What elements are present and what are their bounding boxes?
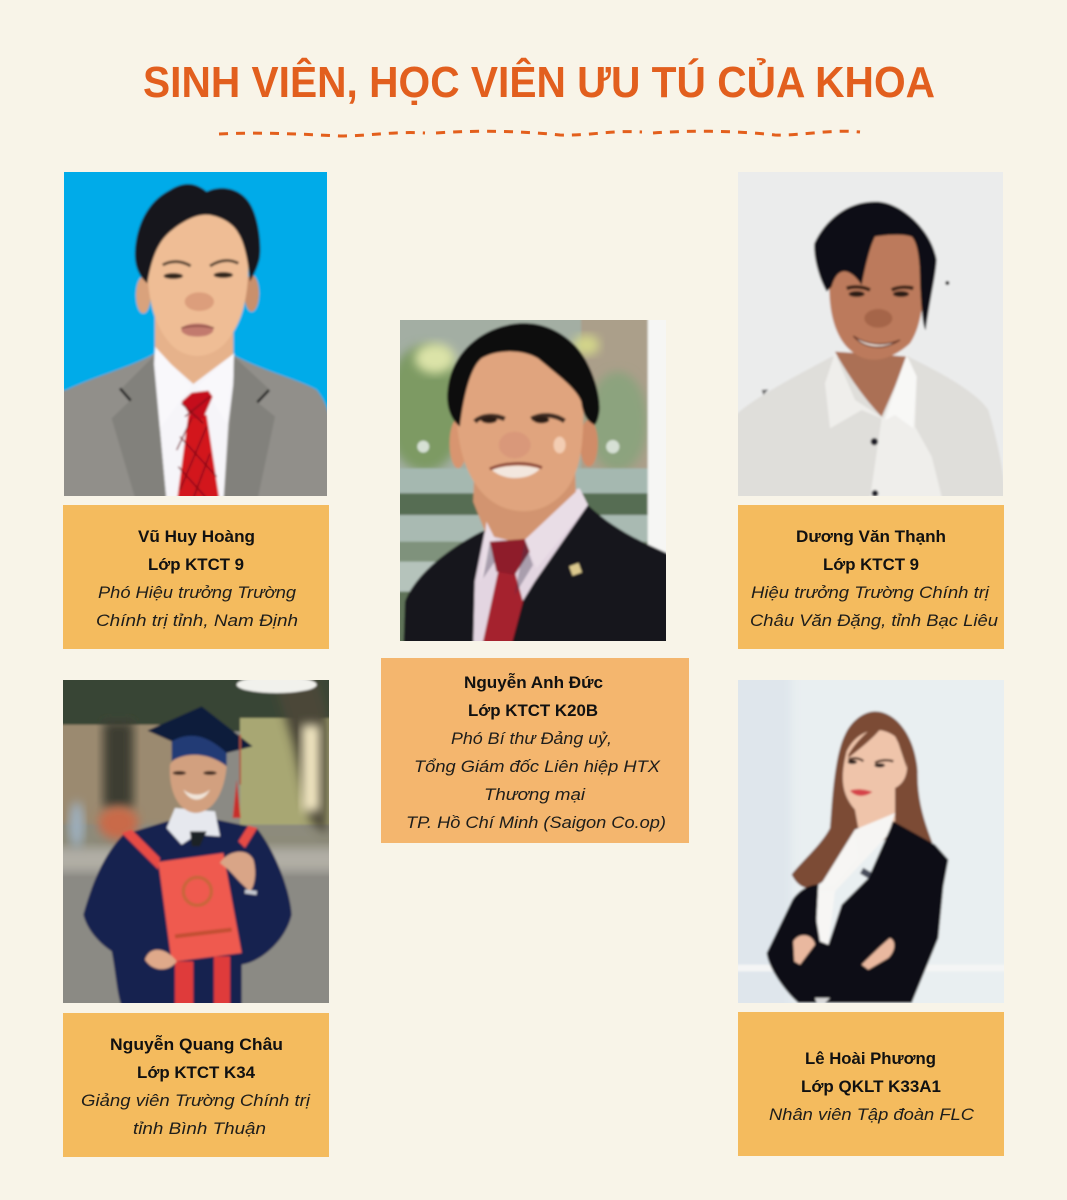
- title: SINH VIÊN, HỌC VIÊN ƯU TÚ CỦA KHOA: [143, 56, 935, 107]
- dashed wavy underline: [219, 131, 860, 136]
- photo: Nguyễn Anh Đức: [400, 320, 666, 641]
- caption: Vũ Huy Hoàng: Chính trị tỉnh, Nam Định: [96, 611, 298, 630]
- caption: Nguyễn Anh Đức: Tổng Giám đốc Liên hiệp HTX: [414, 757, 661, 776]
- panel: Dương Văn Thạnh: [725, 160, 1018, 649]
- caption: Lê Hoài Phương: Lớp QKLT K33A1: [801, 1077, 941, 1096]
- photo: Lê Hoài Phương: [738, 680, 1004, 1003]
- caption: Dương Văn Thạnh: Dương Văn Thạnh: [796, 527, 946, 546]
- caption: Nguyễn Anh Đức: Lớp KTCT K20B: [468, 701, 598, 720]
- caption: Nguyễn Quang Châu: Giảng viên Trường Chính trị: [81, 1091, 311, 1110]
- caption: Vũ Huy Hoàng: Vũ Huy Hoàng: [138, 527, 255, 546]
- photo: Nguyễn Quang Châu: [63, 680, 329, 1003]
- caption: Nguyễn Anh Đức: Phó Bí thư Đảng uỷ,: [451, 729, 612, 748]
- caption: Nguyễn Quang Châu: tỉnh Bình Thuận: [133, 1119, 266, 1138]
- caption: Dương Văn Thạnh: Châu Văn Đặng, tỉnh Bạc Liêu: [750, 611, 999, 630]
- caption: Nguyễn Anh Đức: [381, 658, 689, 843]
- photo: Vũ Huy Hoàng: [64, 172, 327, 496]
- caption: Nguyễn Quang Châu: [63, 1013, 329, 1157]
- panel: Lê Hoài Phương: [725, 668, 1018, 1156]
- panel: Nguyễn Quang Châu: [50, 668, 343, 1157]
- caption: Vũ Huy Hoàng: [63, 505, 329, 649]
- caption: Lê Hoài Phương: Lê Hoài Phương: [805, 1049, 936, 1068]
- panel: Nguyễn Anh Đức: [381, 305, 689, 843]
- caption: Dương Văn Thạnh: Lớp KTCT 9: [823, 555, 919, 574]
- caption: Nguyễn Anh Đức: Nguyễn Anh Đức: [464, 673, 603, 692]
- caption: Nguyễn Quang Châu: Lớp KTCT K34: [137, 1063, 256, 1082]
- caption: Lê Hoài Phương: Nhân viên Tập đoàn FLC: [769, 1105, 975, 1124]
- caption: Dương Văn Thạnh: Hiệu trưởng Trường Chính trị: [751, 583, 990, 602]
- caption: Nguyễn Anh Đức: TP. Hồ Chí Minh (Saigon Co.op): [406, 813, 666, 832]
- panel: Vũ Huy Hoàng: [50, 160, 343, 649]
- caption: Vũ Huy Hoàng: Phó Hiệu trưởng Trường: [98, 583, 297, 602]
- caption: Nguyễn Quang Châu: Nguyễn Quang Châu: [110, 1035, 283, 1054]
- caption: Lê Hoài Phương: [738, 1012, 1004, 1156]
- caption: Vũ Huy Hoàng: Lớp KTCT 9: [148, 555, 244, 574]
- caption: Dương Văn Thạnh: [738, 505, 1004, 649]
- photo: Dương Văn Thạnh: [738, 172, 1003, 496]
- caption: Nguyễn Anh Đức: Thương mại: [484, 785, 586, 804]
